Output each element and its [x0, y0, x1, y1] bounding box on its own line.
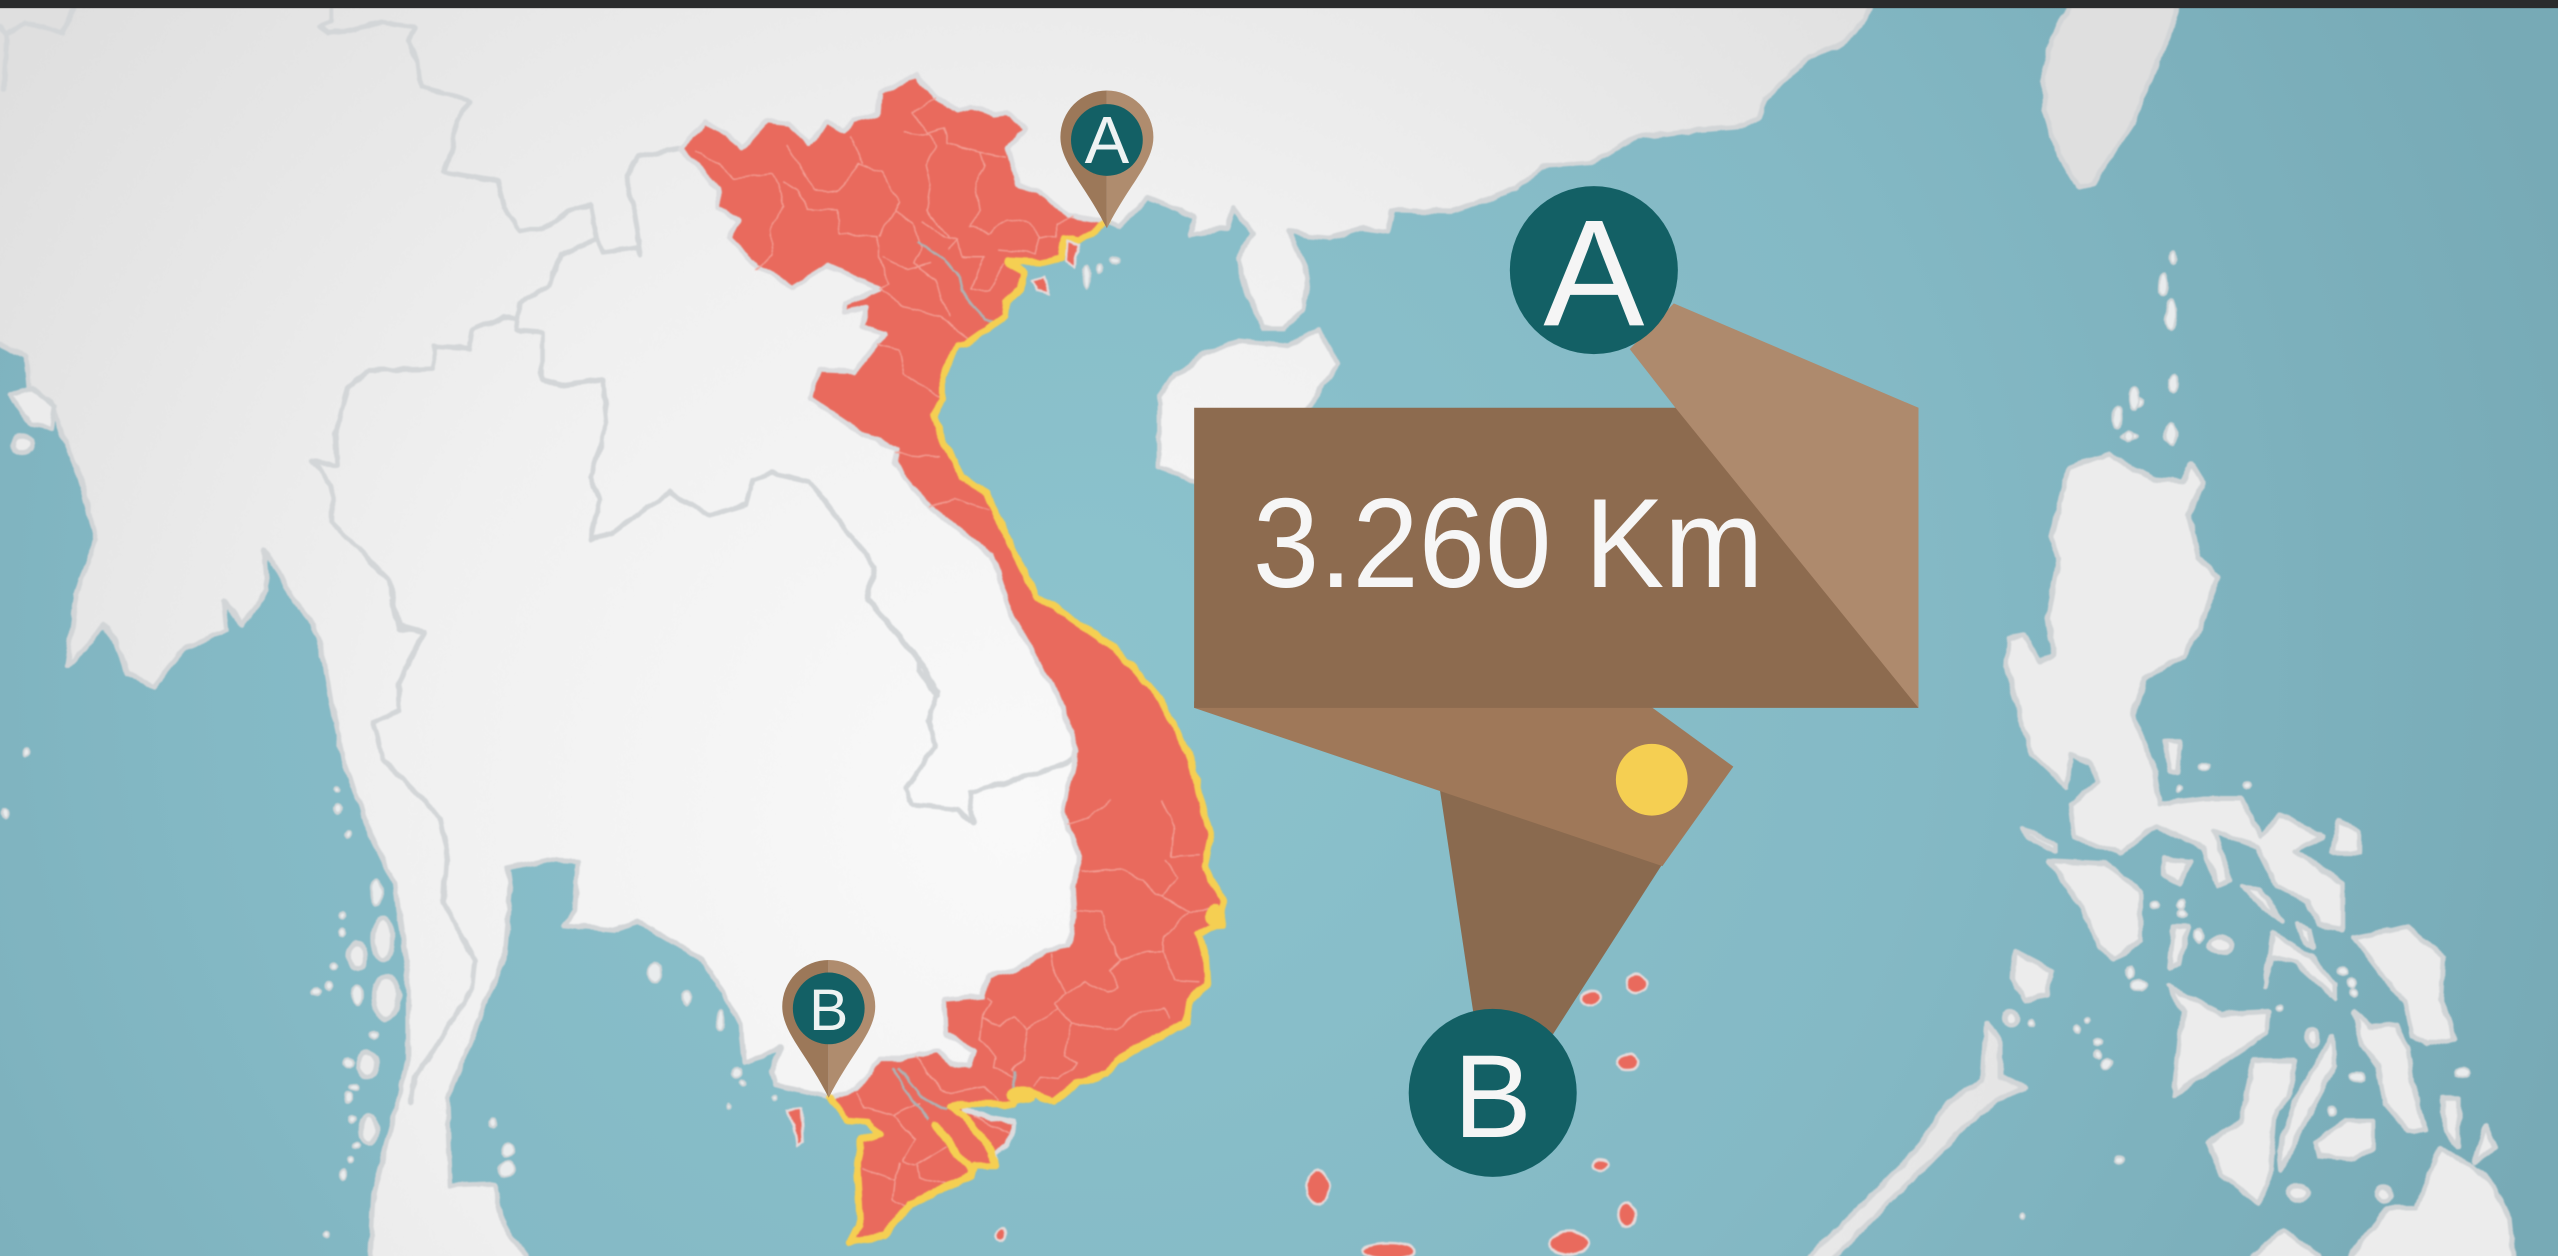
marker B badge	[1409, 1009, 1577, 1177]
land: Taiwan	[2044, 0, 2194, 188]
land: mainland Southeast Asia and China	[0, 0, 1876, 1256]
map pin A	[1060, 91, 1153, 228]
map pin B	[782, 960, 875, 1098]
land: Philippine islands	[2004, 398, 2521, 1256]
marker A badge	[1510, 186, 1678, 358]
distance label: 3.260 Km	[1253, 472, 1764, 614]
map pin A: A	[1085, 103, 1130, 178]
Vietnam mainland	[680, 75, 1224, 1241]
land: Palawan tail	[1770, 1023, 2026, 1256]
marker B badge: B	[1454, 1031, 1532, 1162]
marker A badge: A	[1543, 189, 1644, 358]
islands off Rakhine coast	[10, 388, 54, 453]
country borders	[0, 9, 1085, 1102]
top window bar	[0, 0, 2558, 8]
Vietnamese offshore islands	[788, 241, 1647, 1256]
province lines central and south	[857, 800, 1210, 1207]
province lines north	[696, 98, 1073, 510]
callout: distance ribbon	[1194, 303, 1918, 1034]
small islands Andaman sea and Gulf of Thailand	[1, 749, 776, 1238]
yellow dot	[1616, 744, 1688, 816]
ribbon fold top right	[1630, 303, 1918, 708]
ribbon fold lower	[1439, 783, 1667, 1034]
distance box	[1194, 408, 1918, 708]
map pin B: B	[809, 978, 848, 1043]
small islands north of Luzon	[2113, 251, 2178, 445]
yellow coastline from A to B	[830, 222, 1224, 1241]
land: Hainan island	[1159, 329, 1338, 489]
